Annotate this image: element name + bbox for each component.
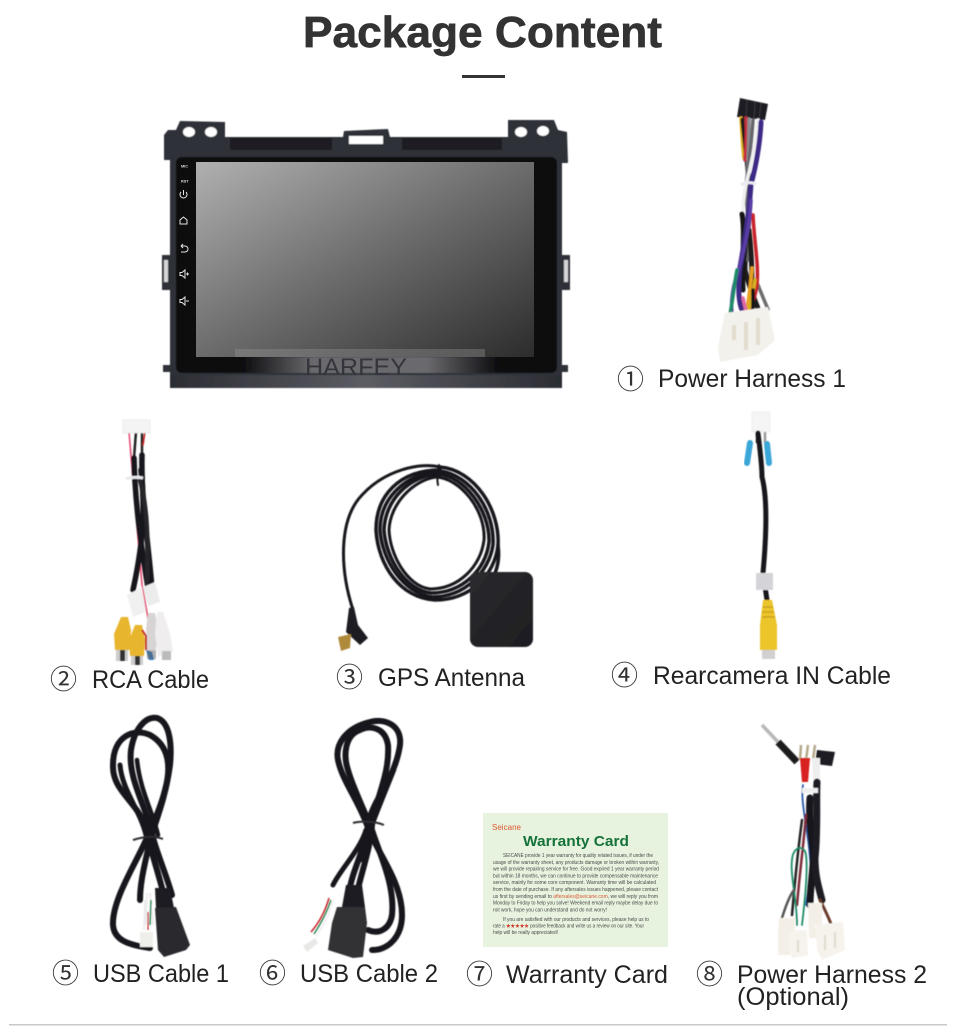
bottom connectors <box>778 918 795 955</box>
panel: usb cable 1 <box>113 718 190 957</box>
label: warranty card <box>466 953 668 992</box>
label: usb cable 1: USB Cable 1 <box>93 960 229 988</box>
label: power harness 1 <box>617 358 846 397</box>
side buttons: MIC <box>181 164 188 168</box>
antenna module <box>470 572 533 647</box>
bottom connector <box>718 307 775 362</box>
label: power harness 2 <box>696 953 927 1011</box>
card body: us first by sending email to aftersales@seicane.com, we will reply you from <box>493 894 658 900</box>
card body: SEICANE provide 1 year warranty for quality related issues, if under the <box>503 853 653 859</box>
panel: power harness 1 <box>718 98 775 362</box>
panel: head unit <box>162 120 570 388</box>
title: Package Content <box>303 8 662 57</box>
label: rearcamera cable: ④ <box>611 654 638 693</box>
antenna plug <box>762 725 778 742</box>
panel: rearcamera cable <box>747 412 777 659</box>
panel: power harness 2 <box>762 725 845 960</box>
panel: usb cable 2 <box>303 721 402 958</box>
side buttons <box>180 164 189 305</box>
card body: Monday to Friday to help you solve! Weekend email reply maybe delay due to <box>493 900 658 906</box>
label: rearcamera cable <box>611 654 891 693</box>
label: gps antenna <box>336 656 525 695</box>
label: power harness 2: (Optional) <box>737 983 849 1011</box>
card body: If you are satisfied with our products and services, please help us to <box>503 917 649 923</box>
label: warranty card: ⑦ <box>466 953 493 992</box>
card body: not work, hope you can understand and do not worry! <box>493 908 607 914</box>
label: power harness 1: ① <box>617 358 644 397</box>
plugs <box>114 617 131 650</box>
top connector <box>737 98 768 120</box>
panel: gps antenna <box>338 465 533 651</box>
label: usb cable 2 <box>259 952 438 991</box>
card body <box>493 853 659 936</box>
label: gps antenna: GPS Antenna <box>378 664 525 692</box>
white connector <box>123 420 150 433</box>
card body: help will be really appreciated! <box>493 930 558 936</box>
label: usb cable 2: ⑥ <box>259 952 286 991</box>
top rca and connector <box>815 750 835 766</box>
head unit frame <box>162 120 570 388</box>
label: warranty card: Warranty Card <box>506 961 668 989</box>
card body: we will provide repairing service for free. Good expired 1 year warranty period <box>493 866 659 872</box>
label: power harness 1: Power Harness 1 <box>658 365 846 393</box>
cable loops <box>343 465 499 610</box>
card body: usage of the warranty sheet, any products damage or broken within warranty, <box>493 860 659 866</box>
panel: rca cable <box>114 420 173 665</box>
title underline <box>462 75 505 78</box>
side buttons: RST <box>181 180 189 184</box>
card body: but within 18 months, we can continue to provide compensable maintenance <box>493 874 658 880</box>
panel: warranty card <box>483 813 668 947</box>
label: rca cable: RCA Cable <box>92 666 209 694</box>
label: usb cable 1: ⑤ <box>52 952 79 991</box>
card body: rate a ★★★★★ positive feedback and write us a review on our site. Your <box>493 924 644 930</box>
wires <box>730 118 768 316</box>
card body: from the date of purchase. If any aftersales issues happened, please contact <box>493 887 659 893</box>
label: rca cable <box>50 658 209 697</box>
label: power harness 2: ⑧ <box>696 953 723 992</box>
harness wires <box>782 782 831 925</box>
label: rearcamera cable: Rearcamera IN Cable <box>653 662 891 690</box>
card body: service, mainly for some core component. Warranty time will be calculated <box>493 880 656 886</box>
watermark: HARFEY <box>305 354 407 381</box>
label: rca cable: ② <box>50 658 77 697</box>
label: usb cable 2: USB Cable 2 <box>300 960 438 988</box>
label: gps antenna: ③ <box>336 656 363 695</box>
card heading: Warranty Card <box>523 833 629 850</box>
label: usb cable 1 <box>52 952 229 991</box>
screen <box>196 162 534 357</box>
sma connector <box>346 607 368 645</box>
brand: Seicane <box>492 823 522 832</box>
label: power harness 2: Power Harness 2 <box>737 961 927 989</box>
label sleeves <box>127 587 146 617</box>
